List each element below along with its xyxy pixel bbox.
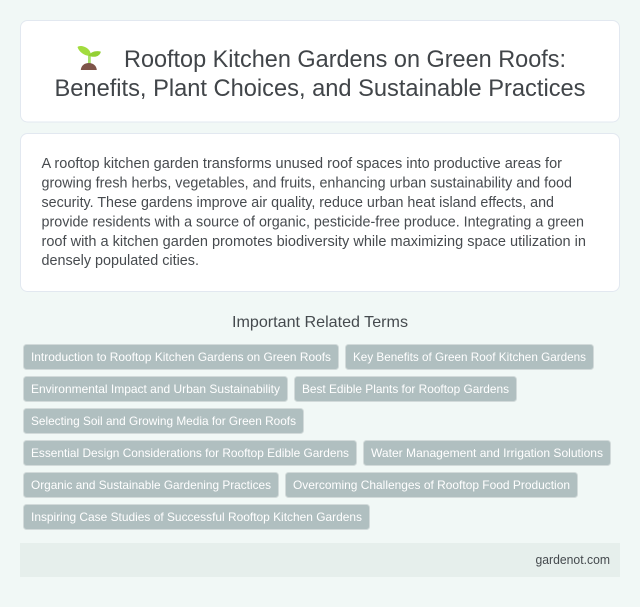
tag: best edible plants: [294, 376, 516, 402]
tag: water management: Water Management and Irrigation Solutions: [371, 446, 603, 460]
tag: case studies: Inspiring Case Studies of Successful Rooftop Kitchen Gardens: [31, 510, 362, 524]
text block: introduction: [42, 156, 586, 269]
tag: introduction: Introduction to Rooftop Kitchen Gardens on Green Roofs: [31, 350, 331, 364]
tag: overcoming challenges: [286, 472, 578, 498]
panel: header: [20, 20, 620, 122]
tag: organic practices: Organic and Sustainable Gardening Practices: [31, 478, 271, 492]
tag list: [24, 344, 610, 530]
footer: [20, 543, 620, 577]
tag: selecting soil: Selecting Soil and Growing Media for Green Roofs: [31, 414, 296, 428]
text block: introduction: roof with a kitchen garden promotes biodiversity while maximizing space utilization in: [42, 234, 586, 250]
title: [54, 46, 586, 102]
footer source text: gardenot.com: [536, 553, 610, 567]
text block: introduction: growing fresh herbs, vegetables, and fruits, enhancing urban sustainability and food: [42, 176, 572, 192]
tag: selecting soil: [24, 408, 304, 434]
text block: introduction: security. These gardens improve air quality, reduce urban heat island effects, and: [42, 195, 554, 211]
tag: key benefits: [346, 344, 594, 370]
icon: seedling: [78, 46, 101, 70]
title: Rooftop Kitchen Gardens on Green Roofs:: [124, 46, 566, 73]
tag: introduction: [24, 344, 338, 370]
tag: best edible plants: Best Edible Plants for Rooftop Gardens: [302, 382, 509, 396]
tag: environmental impact: Environmental Impact and Urban Sustainability: [31, 382, 280, 396]
tag: environmental impact: [24, 376, 288, 402]
tag: design considerations: [24, 440, 356, 466]
text block: introduction: densely populated cities.: [42, 253, 199, 269]
tag: overcoming challenges: Overcoming Challenges of Rooftop Food Production: [293, 478, 570, 492]
tag: organic practices: [24, 472, 278, 498]
tag: case studies: [24, 504, 370, 530]
panel: introduction text: [20, 134, 620, 292]
tag: key benefits: Key Benefits of Green Roof Kitchen Gardens: [353, 350, 586, 364]
title: Benefits, Plant Choices, and Sustainable Practices: [54, 75, 586, 102]
text block: introduction: provide residents with a source of organic, pesticide-free produce. Integrating a green: [42, 214, 584, 230]
heading: important related terms: Important Related Terms: [232, 314, 408, 331]
tag: design considerations: Essential Design Considerations for Rooftop Edible Gardens: [31, 446, 349, 460]
tag: water management: [364, 440, 610, 466]
text block: introduction: A rooftop kitchen garden transforms unused roof spaces into productive areas for: [42, 156, 562, 172]
